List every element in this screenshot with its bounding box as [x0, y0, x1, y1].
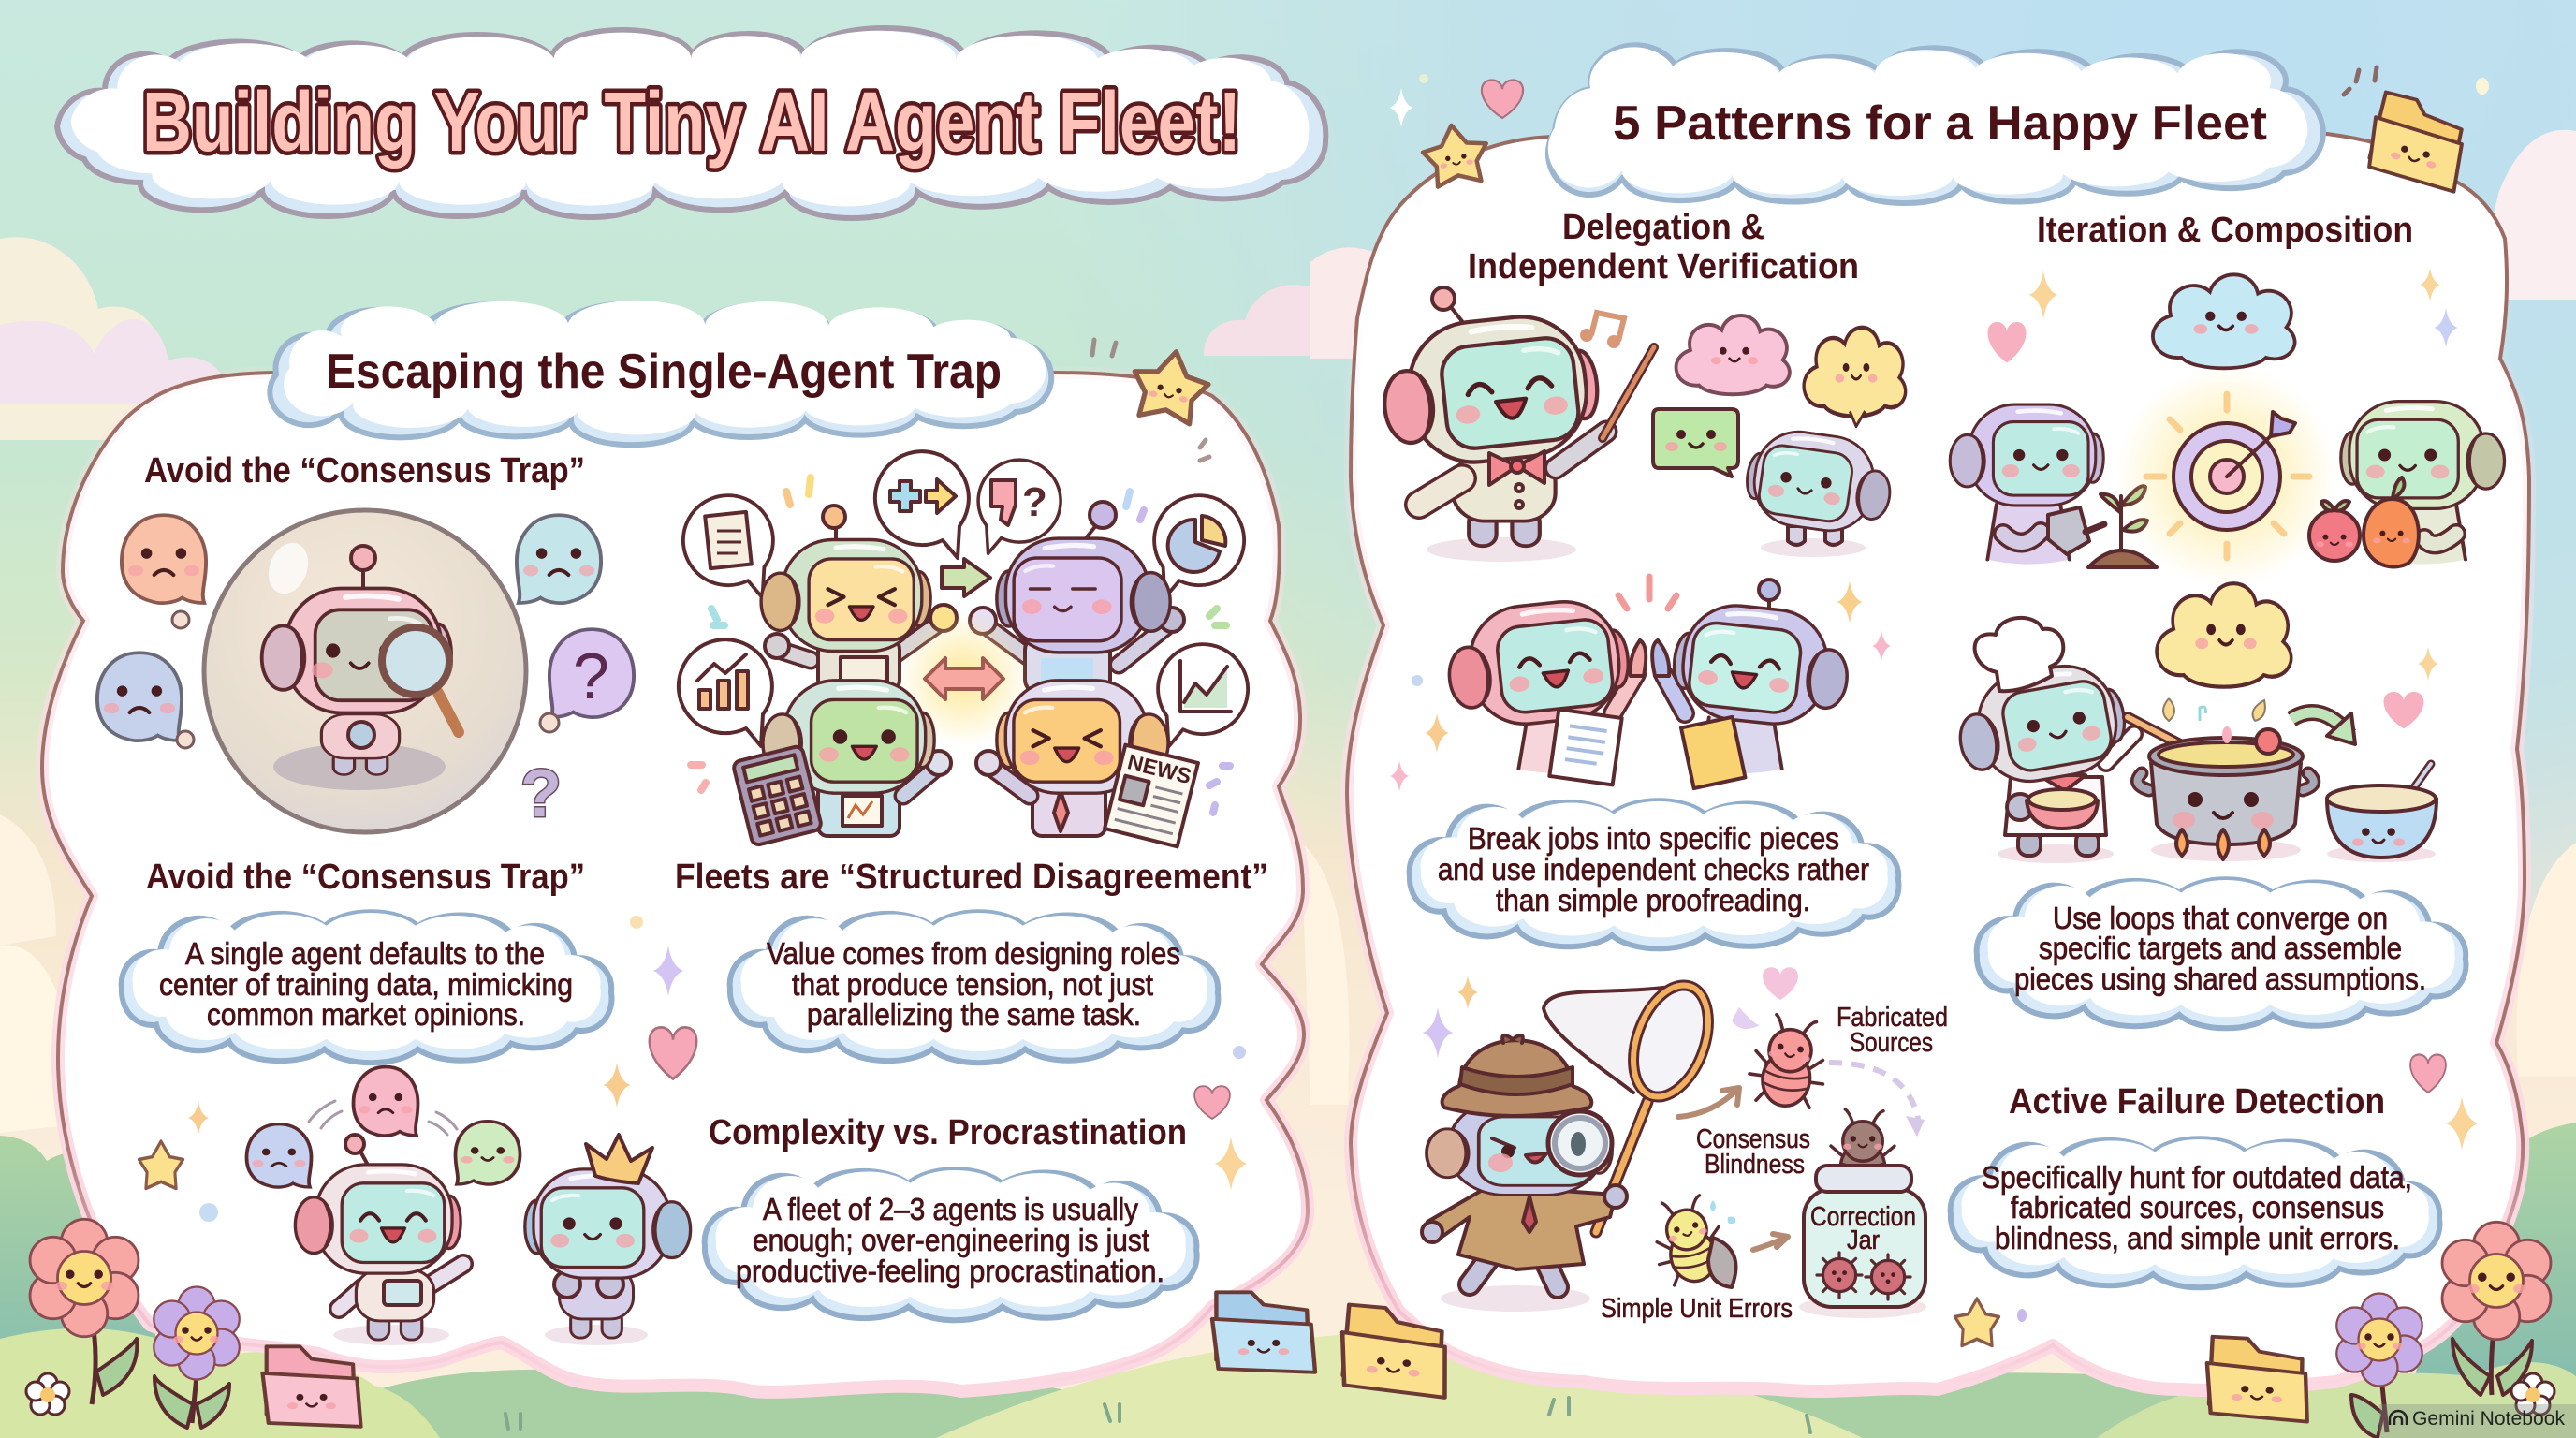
heading: avoid the consensus trap: Avoid the “Consensus Trap”	[146, 858, 585, 897]
icon: peach sad face	[122, 515, 206, 603]
arrow: green	[942, 559, 990, 596]
icon: question mark: ?	[520, 756, 562, 831]
heading: iteration: Iteration & Composition	[2037, 211, 2413, 250]
crown	[586, 1135, 652, 1183]
icons: delegated clouds	[1653, 315, 1906, 477]
illustration: chef robot	[1951, 618, 2205, 863]
callout: delegation: Break jobs into specific pieces	[1468, 821, 1839, 856]
detective hat	[1442, 1040, 1591, 1116]
icons: yellow cloud and decorations	[2157, 583, 2438, 744]
heading: avoid the consensus trap (top): Avoid the “Consensus Trap”	[144, 451, 585, 491]
callout: active failure detection: Specifically hunt for outdated data,	[1982, 1160, 2412, 1195]
illustration: robot with apples	[2309, 402, 2504, 566]
icon: star on left panel	[1128, 345, 1213, 426]
confetti	[691, 477, 1230, 813]
title	[57, 28, 1325, 218]
bow tie	[1489, 451, 1544, 485]
icon: yellow folder bottom right	[2204, 1336, 2311, 1422]
sprout	[2119, 496, 2123, 550]
robot: green with calculator	[732, 681, 951, 846]
robot	[262, 546, 459, 775]
speech bubble: line chart	[1158, 644, 1248, 746]
callout: iteration: Use loops that converge on	[2053, 901, 2388, 935]
spoon	[2128, 717, 2205, 757]
callout: single agent: A single agent defaults to the	[185, 936, 545, 971]
flowers left	[26, 1219, 240, 1428]
panel: escaping the single-agent trap	[42, 373, 1308, 1392]
apples	[2424, 534, 2456, 544]
callout: single agent: center of training data, mimicking	[159, 967, 573, 1002]
hills	[0, 1123, 2576, 1438]
heading text: 5 Patterns for a Happy Fleet	[1613, 96, 2267, 151]
icon: teal sad face	[517, 515, 601, 603]
robot: yellow	[761, 506, 957, 693]
illustration: bugs and correction jar	[1423, 967, 1926, 1318]
chef hat	[1975, 618, 2063, 691]
speech bubble: bar chart	[679, 639, 772, 746]
callout: structured disagreement	[730, 912, 1218, 1063]
heading: fleets are structured disagreement: Fleets are “Structured Disagreement”	[675, 858, 1268, 897]
music note	[1591, 313, 1624, 341]
label: fabricated sources: Sources	[1850, 1028, 1933, 1058]
newspaper: NEWS	[1125, 749, 1193, 788]
star on right panel	[1420, 121, 1491, 188]
watering can	[2048, 507, 2089, 554]
heading: delegation: Independent Verification	[1468, 247, 1859, 286]
watermark: Gemini Notebook: Gemini Notebook	[2412, 1408, 2565, 1430]
decorative icons right top	[1389, 67, 2489, 127]
clipboard	[1681, 717, 1745, 788]
illustration: robot in echo bubble	[204, 510, 526, 832]
illustration: bugs and correction jar: Jar	[1847, 1225, 1880, 1255]
trench coat	[1427, 1191, 1616, 1269]
background clouds	[0, 130, 2576, 1133]
panel: 5 patterns for a happy fleet	[1347, 134, 2529, 1391]
document	[1549, 710, 1622, 785]
illustration: robot watering sprout	[1950, 404, 2157, 567]
speech bubble: thumbs down and question	[978, 460, 1061, 553]
callout: active failure detection	[1951, 1138, 2439, 1287]
watermark: Gemini Notebook	[2379, 1404, 2576, 1438]
callout: iteration: pieces using shared assumptions.	[2014, 961, 2426, 996]
newspaper	[1105, 745, 1198, 846]
mixing bowl	[2007, 794, 2033, 820]
icon: purple question bubble	[549, 629, 634, 717]
icon: lavender sad face	[97, 653, 182, 741]
label: fabricated sources	[1837, 1003, 1948, 1058]
flowers right	[2336, 1222, 2554, 1438]
callout: delegation: than simple proofreading.	[1496, 883, 1810, 917]
callout: active failure detection: blindness, and simple unit errors.	[1995, 1221, 2400, 1255]
illustration: conductor robot	[1377, 287, 1654, 562]
illustration: robot juggling opinions	[247, 1067, 520, 1345]
robot: purple	[970, 502, 1184, 693]
callout: delegation	[1410, 800, 1898, 948]
callout: single agent: common market opinions.	[207, 997, 525, 1032]
icon: purple question bubble: ?	[573, 639, 609, 712]
jar	[1799, 1296, 1926, 1318]
callout: complexity	[705, 1169, 1197, 1320]
section heading: escaping the single-agent trap	[270, 301, 1051, 445]
illustration: target	[2116, 366, 2337, 587]
title text: Building Your Tiny AI Agent Fleet!	[142, 76, 1241, 169]
callout: delegation: and use independent checks rather	[1438, 852, 1869, 887]
section heading: 5 patterns	[1548, 45, 2323, 203]
callout: structured disagreement: that produce tension, not just	[792, 967, 1153, 1002]
decorative icons left panel	[139, 916, 1247, 1222]
arrow: pink tension	[897, 611, 1032, 746]
icon: pink folder	[262, 1346, 361, 1427]
baton	[1603, 347, 1654, 438]
illustration: blue bowl	[2327, 764, 2437, 862]
pink robot	[1442, 595, 1646, 773]
opinion bubbles	[247, 1067, 520, 1187]
calculator	[732, 745, 822, 846]
label: fabricated sources: Fabricated	[1837, 1003, 1948, 1033]
face	[1488, 1138, 1546, 1172]
callout: structured disagreement: parallelizing the same task.	[807, 997, 1141, 1032]
label: simple unit errors: Simple Unit Errors	[1601, 1294, 1793, 1324]
callout: complexity: enough; over-engineering is just	[753, 1223, 1149, 1257]
yellow bug	[1645, 1190, 1734, 1289]
icon: yellow folder center	[1338, 1304, 1452, 1398]
heading: complexity vs procrastination: Complexity vs. Procrastination	[709, 1113, 1187, 1152]
callout: complexity: productive-feeling procrastination.	[736, 1254, 1164, 1288]
callout: complexity: A fleet of 2–3 agents is usually	[763, 1192, 1138, 1226]
callout: structured disagreement: Value comes from designing roles	[767, 936, 1180, 971]
label: consensus blindness	[1696, 1124, 1810, 1180]
label: consensus blindness: Consensus	[1696, 1124, 1810, 1154]
robot: orange with newspaper	[976, 681, 1198, 846]
icon: blue folder	[1212, 1292, 1315, 1372]
speech bubble: document	[683, 495, 773, 597]
callout: iteration	[1977, 879, 2466, 1028]
callout: active failure detection: fabricated sources, consensus	[2011, 1190, 2384, 1225]
callout: iteration: specific targets and assemble	[2039, 931, 2402, 965]
lilac robot	[1652, 580, 1853, 773]
heading: delegation	[1468, 208, 1859, 286]
heading text: Escaping the Single-Agent Trap	[326, 345, 1002, 399]
illustration: detective robot	[1422, 975, 1722, 1312]
magnifying glass	[1548, 1111, 1612, 1175]
illustration: high five robots	[1390, 577, 1891, 792]
speech bubble: pie chart	[1154, 495, 1244, 597]
icon: yellow folder top right	[2363, 92, 2473, 192]
illustration: pot	[2138, 726, 2314, 861]
small thought dots	[172, 611, 559, 748]
label: consensus blindness: Blindness	[1705, 1150, 1805, 1180]
icon: motion marks	[1092, 340, 1209, 461]
heading: active failure detection: Active Failure Detection	[2009, 1082, 2385, 1122]
illustration: robot with crown	[525, 1135, 691, 1345]
iteration decorative icons	[1987, 268, 2458, 368]
speech bubble: thumbs down and question: ?	[1022, 479, 1047, 525]
illustration: bugs and correction jar: Correction	[1810, 1202, 1916, 1232]
callout: single agent	[122, 912, 612, 1063]
decorative icons right bottom	[1954, 1054, 2478, 1345]
illustration: four robots in structured disagreement	[679, 451, 1248, 846]
illustration: small robot	[1741, 425, 1896, 557]
speech bubble: plus and arrow	[875, 451, 969, 558]
butterfly net	[1544, 975, 1722, 1232]
heading: delegation: Delegation &	[1562, 208, 1764, 247]
